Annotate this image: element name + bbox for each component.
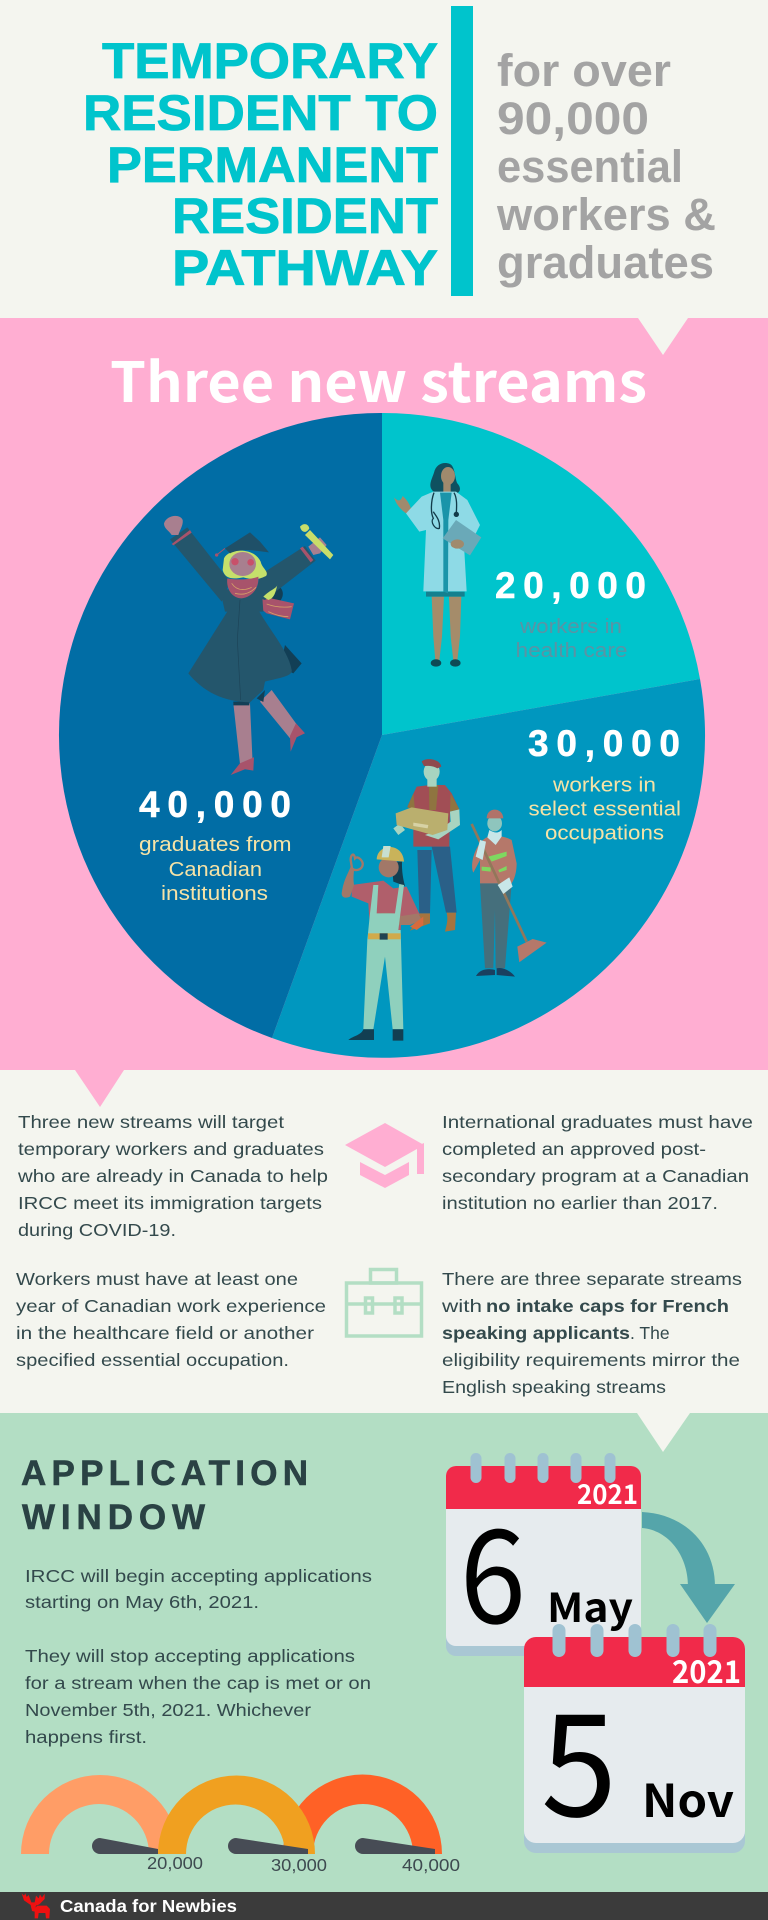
text block: target: Three new streams will target xyxy=(18,1112,284,1132)
stat: 40,000 graduates from Canadian institutions: Canadian xyxy=(169,859,262,881)
calendar: 5 Nov 2021: 2021 xyxy=(672,1647,741,1692)
text block: application dates: They will stop accepting applications xyxy=(25,1646,355,1666)
text block: target: during COVID-19. xyxy=(18,1220,176,1240)
text block: target: IRCC meet its immigration targets xyxy=(18,1193,322,1213)
calendar: 5 Nov 2021: 5 xyxy=(541,1651,617,1857)
subtitle: workers & xyxy=(496,189,716,240)
subtitle: graduates xyxy=(497,237,714,288)
title: TEMPORARY xyxy=(102,33,438,89)
footer bar xyxy=(0,1892,768,1920)
calendar: 5 Nov 2021: Nov xyxy=(642,1765,734,1830)
icon: red moose xyxy=(22,1893,50,1918)
heading: application window: WINDOW xyxy=(22,1498,205,1537)
text block: french streams: English speaking streams xyxy=(442,1377,666,1397)
text block: application dates: starting on May 6th, 2021. xyxy=(25,1592,259,1612)
text block: french streams: . The xyxy=(630,1323,670,1343)
gauges: 20,000 30,000 40,000: 40,000 xyxy=(402,1855,460,1875)
stat: 30,000 workers in select essential occupations: 30,000 xyxy=(528,723,680,764)
illustration: graduate xyxy=(164,516,333,775)
text block: graduates requirement xyxy=(442,1112,753,1213)
gauges: 20,000 30,000 40,000 xyxy=(21,1775,460,1875)
text block: application dates: happens first. xyxy=(25,1727,147,1747)
text block: target: who are already in Canada to help xyxy=(17,1166,328,1186)
text block: workers requirement: Workers must have at least one xyxy=(16,1269,298,1289)
text block: application dates xyxy=(25,1566,372,1747)
text block: workers requirement: in the healthcare field or another xyxy=(16,1323,314,1343)
calendar: 6 May 2021: May xyxy=(547,1576,633,1634)
text block: application dates: IRCC will begin accepting applications xyxy=(25,1566,372,1586)
text block: graduates requirement: International graduates must have xyxy=(442,1112,753,1132)
text block: workers requirement: specified essential occupation. xyxy=(16,1350,289,1370)
panel: application window xyxy=(0,1413,768,1893)
text block: french streams: with xyxy=(441,1296,482,1316)
title: RESIDENT xyxy=(172,188,438,244)
stat: 30,000 workers in select essential occupations xyxy=(528,723,681,844)
text block: french streams: There are three separate streams xyxy=(442,1269,742,1289)
heading: application window xyxy=(21,1454,308,1537)
text block: french streams: eligibility requirements mirror the xyxy=(442,1350,740,1370)
text block: workers requirement xyxy=(16,1269,326,1370)
title xyxy=(83,33,438,296)
stat: 30,000 workers in select essential occupations: occupations xyxy=(545,822,664,844)
calendar: 5 Nov 2021 xyxy=(524,1624,745,1857)
text block: target xyxy=(17,1112,328,1240)
stat: 40,000 graduates from Canadian institutions: graduates from xyxy=(139,834,292,856)
illustration: essential workers xyxy=(342,759,547,1041)
pie chart xyxy=(59,413,705,1058)
stat: 30,000 workers in select essential occupations: select essential xyxy=(528,798,681,820)
worker with hard hat xyxy=(342,846,423,1041)
arrow: May to November xyxy=(642,1512,735,1623)
stat: 30,000 workers in select essential occupations: workers in xyxy=(552,774,656,796)
stat: 40,000 graduates from Canadian institutions: institutions xyxy=(161,883,268,905)
calendar: 6 May 2021: 2021 xyxy=(577,1473,638,1512)
text block: application dates: for a stream when the cap is met or on xyxy=(25,1673,371,1693)
text block: application dates: November 5th, 2021. Whichever xyxy=(25,1700,311,1720)
panel: three new streams xyxy=(0,318,768,1107)
title: RESIDENT TO xyxy=(83,85,438,141)
stat: 40,000 graduates from Canadian institutions: 40,000 xyxy=(139,784,291,825)
stat: 20,000 workers in health care: workers in xyxy=(519,616,622,638)
text block: french streams xyxy=(441,1269,742,1397)
subtitle: 90,000 xyxy=(497,93,649,144)
text block: french streams: speaking applicants xyxy=(442,1323,630,1343)
worker with box xyxy=(393,759,460,932)
text block: workers requirement: year of Canadian work experience xyxy=(16,1296,326,1316)
title: PERMANENT xyxy=(107,137,438,193)
stat: 20,000 workers in health care: 20,000 xyxy=(495,565,646,606)
stat: 40,000 graduates from Canadian institutions xyxy=(139,784,292,905)
gauges: 20,000 30,000 40,000: 30,000 xyxy=(271,1855,327,1875)
text block: graduates requirement: institution no earlier than 2017. xyxy=(442,1193,718,1213)
subtitle: for over xyxy=(497,45,671,96)
calendar: 6 May 2021 xyxy=(446,1453,641,1661)
footer brand name: Canada for Newbies xyxy=(60,1896,237,1916)
text block: graduates requirement: completed an approved post- xyxy=(442,1139,706,1159)
heading: application window: APPLICATION xyxy=(21,1454,308,1493)
text block: target: temporary workers and graduates xyxy=(18,1139,324,1159)
icon: briefcase xyxy=(346,1270,422,1336)
worker with broom xyxy=(472,810,547,977)
calendar: 6 May 2021: 6 xyxy=(460,1473,526,1661)
text block: french streams: no intake caps for French xyxy=(486,1296,729,1316)
text block: graduates requirement: secondary program at a Canadian xyxy=(442,1166,749,1186)
subtitle xyxy=(496,45,716,288)
title divider bar xyxy=(451,6,473,296)
stat: 20,000 workers in health care: health care xyxy=(516,640,628,662)
icon: graduation cap xyxy=(345,1123,424,1188)
title: PATHWAY xyxy=(172,240,438,296)
stat: 20,000 workers in health care xyxy=(495,565,646,662)
gauges: 20,000 30,000 40,000: 20,000 xyxy=(147,1853,203,1873)
illustration: doctor xyxy=(394,463,481,667)
subtitle: essential xyxy=(497,141,683,192)
heading: three new streams: Three new streams xyxy=(110,338,647,418)
